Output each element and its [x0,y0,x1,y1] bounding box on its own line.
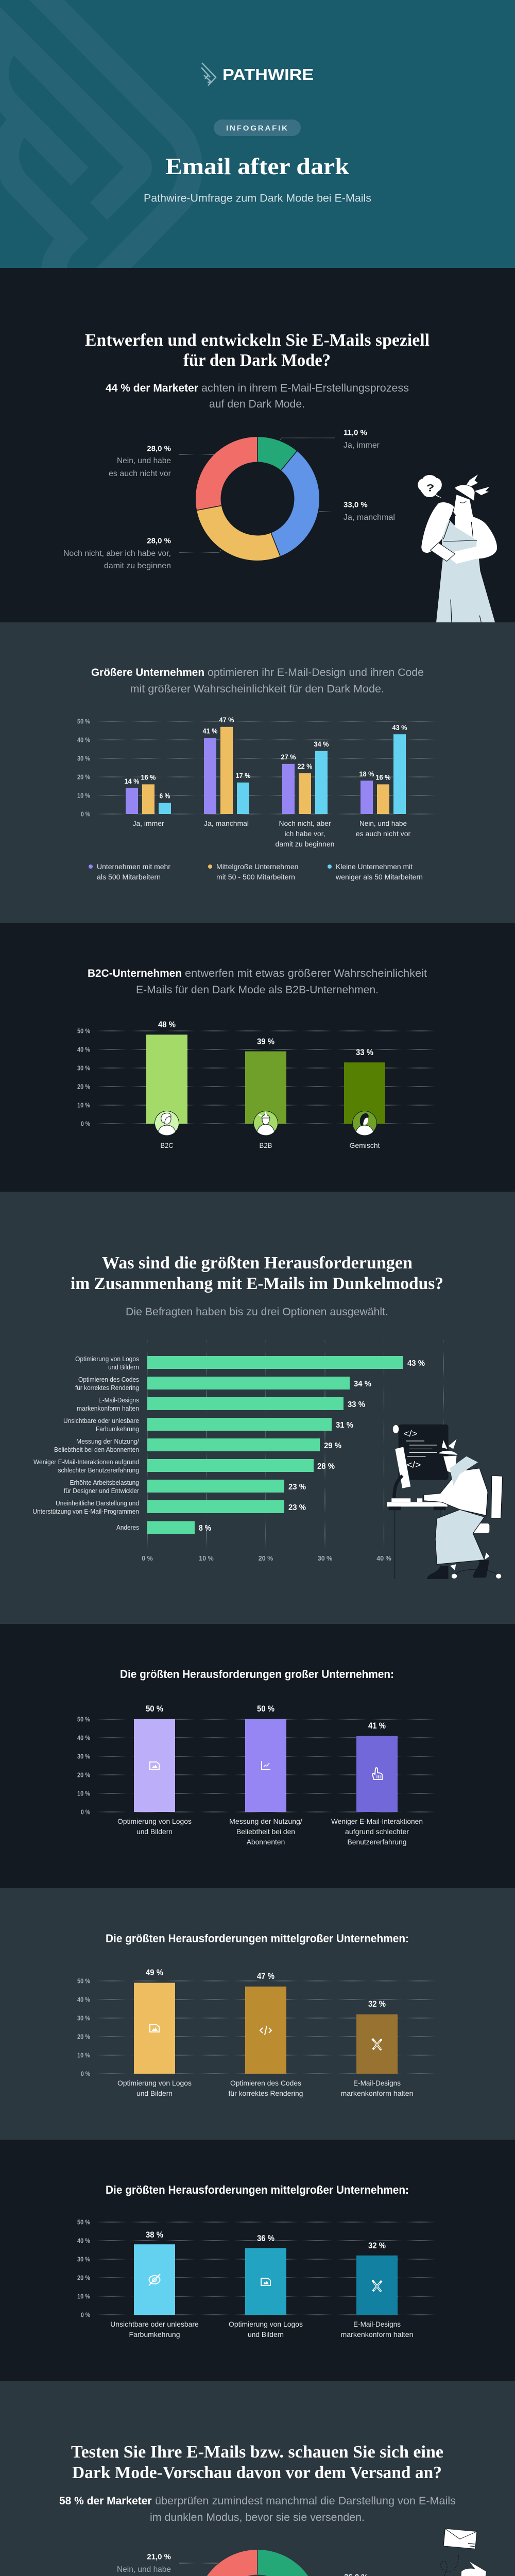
heading: Dark Mode-Vorschau davon vor dem Versand an? [72,2463,442,2482]
legend: mit 50 - 500 Mitarbeitern [216,873,295,881]
illustration: Valkyrie with phone [427,2529,502,2576]
legend [89,862,423,881]
bar chart: company size: 10 % [77,792,90,800]
heading [85,331,430,370]
pill: Infografik: INFOGRAFIK [226,124,287,133]
bar chart: challenges: 29 % [324,1442,341,1450]
label: Ja, immer: Ja, immer [344,441,380,450]
illustration: Hermes with question [418,474,497,622]
icon: pen and brush [372,2039,382,2050]
heading [71,2443,443,2482]
bar chart: challenges: 40 % [376,1555,391,1562]
bar chart: large companies: Messung der Nutzung/ [229,1817,302,1825]
legend: weniger als 50 Mitarbeitern [335,873,423,881]
bar chart: challenges: Unterstützung von E-Mail-Programmen [32,1508,139,1515]
text: B2C: B2C-Unternehmen [88,968,182,979]
panel: small companies [77,2183,436,2338]
donut chart [188,2542,327,2576]
bar chart: challenges: schlechter Benutzererfahrung [58,1467,139,1474]
bar chart: B2C B2B: B2B [260,1141,272,1149]
bar chart: challenges: Uneinheitliche Darstellung und [56,1500,139,1507]
panel: dark mode design donut [63,331,497,622]
intro text: auf den Dark Mode. [209,398,305,410]
bar chart: small companies: Farbumkehrung [129,2330,180,2338]
heading: Was sind die größten Herausforderungen [102,1253,413,1273]
bar chart: challenges: für Designer und Entwickler [64,1487,139,1495]
heading: Die größten Herausforderungen mittelgroßer Unternehmen: [106,2183,409,2196]
text: company size: mit größerer Wahrscheinlichkeit für den Dark Mode. [130,683,384,695]
text: company size [91,667,424,695]
label: Noch nicht: Noch nicht, aber ich habe vor, [63,549,171,558]
bar chart: challenges [32,1341,443,1562]
bar chart: B2C B2B: 40 % [77,1046,90,1053]
bar chart: small companies: und Bildern [248,2330,284,2338]
bar chart: challenges: für korrektes Rendering [75,1384,139,1392]
bar chart: large companies: Optimierung von Logos [117,1817,192,1825]
bar chart: company size: es auch nicht vor [356,829,411,838]
bar chart: company size: 22 % [298,762,313,770]
figure [424,1439,489,1579]
intro text [106,382,409,410]
bar chart: company size: 40 % [77,737,90,744]
intro text: überprüfen zumindest manchmal die Darstellung von E-Mails [155,2495,456,2507]
heading: im Zusammenhang mit E-Mails im Dunkelmodus? [71,1274,443,1293]
icon: image file [150,1762,159,1769]
intro text [59,2495,456,2523]
bar chart: company size: 18 % [359,770,374,778]
bar chart: challenges: 33 % [348,1400,365,1409]
bar chart: company size: 0 % [81,811,90,818]
bar chart: challenges: 20 % [259,1555,273,1562]
bar chart: B2C B2B: 30 % [77,1064,90,1072]
bar chart: medium companies: für korrektes Rendering [229,2089,303,2097]
monitor [393,1425,449,1498]
bar chart: medium companies: 40 % [77,1996,90,2003]
bar chart: challenges: 23 % [288,1503,306,1512]
bar chart: B2C B2B: 33 % [356,1047,373,1057]
label: Ja, immer [280,429,380,450]
icon: B2B medallion [253,1111,278,1137]
bar chart: small companies: E-Mail-Designs [353,2320,401,2328]
bar chart: challenges: 30 % [318,1555,332,1562]
legend: als 500 Mitarbeitern [97,873,161,881]
logo: Pathwire: PATHWIRE [222,65,314,83]
bar chart: small companies: 20 % [77,2274,90,2281]
bar chart: large companies: 41 % [368,1721,386,1731]
bar chart: large companies: und Bildern [136,1827,173,1836]
bar chart: challenges: und Bildern [108,1364,139,1371]
bar chart: company size: 14 % [125,777,140,785]
icon: pointer hand [372,1768,382,1780]
bar chart: large companies: 0 % [81,1808,90,1816]
bar chart: small companies: 38 % [146,2230,163,2240]
bar chart: large companies: 10 % [77,1790,90,1797]
bar chart: medium companies: und Bildern [136,2089,173,2097]
bar chart: company size: 30 % [77,755,90,762]
intro text: im dunklen Modus, bevor sie sie versenden. [150,2512,365,2523]
bar chart: medium companies: 20 % [77,2033,90,2040]
label: Ja, immer: 11,0 % [344,429,367,437]
envelope [443,2529,477,2549]
donut chart [188,429,327,568]
bar chart: challenges: Farbumkehrung [96,1426,139,1433]
bar chart: large companies: 50 % [146,1704,163,1714]
bar chart: B2C B2B: 10 % [77,1101,90,1109]
bar chart: company size: 16 % [141,773,156,781]
label: Noch nicht [63,537,221,570]
bar chart: medium companies [77,1968,437,2097]
bar chart: small companies: 32 % [368,2241,386,2250]
bar chart: medium companies: 10 % [77,2052,90,2059]
bar chart: challenges: Optimieren des Codes [78,1376,139,1383]
chair [452,1476,503,1579]
bar chart: large companies: 30 % [77,1753,90,1760]
bar chart: company size: Nein, und habe [359,819,407,827]
bar chart: B2C B2B: 39 % [257,1037,274,1046]
bar chart: challenges: 8 % [199,1524,211,1533]
label: Ja, manchmal: Ja, manchmal [344,513,395,522]
bar chart: company size: 17 % [236,771,251,779]
bar chart: medium companies: 49 % [146,1968,163,1977]
bar chart: large companies: Benutzererfahrung [347,1838,407,1846]
bar chart: medium companies: 0 % [81,2070,90,2077]
bar chart: small companies: 50 % [77,2218,90,2226]
bar chart: large companies: Weniger E-Mail-Interaktionen [331,1817,423,1825]
bar chart: challenges: 31 % [336,1421,353,1430]
label: Noch nicht: damit zu beginnen [104,562,171,570]
bar chart: company size: 41 % [203,726,218,735]
bar chart: company size: 20 % [77,774,90,781]
panel: B2C chart [77,968,436,1149]
bar chart: small companies [77,2218,437,2338]
label: Nein: Nein, und habe [117,2565,171,2574]
bar chart: challenges: E-Mail-Designs [98,1397,139,1404]
bar chart: challenges: Anderes [116,1524,139,1531]
bar chart: B2C B2B: 48 % [158,1020,176,1029]
bar chart: small companies: 30 % [77,2256,90,2263]
bar chart: large companies [77,1704,437,1846]
bar chart: company size: 27 % [281,753,296,761]
monitor: </> [403,1429,418,1438]
label: Nein [109,2552,218,2576]
bar chart: challenges: 34 % [354,1380,371,1388]
heading [71,1253,443,1293]
bar chart: small companies: Optimierung von Logos [229,2320,303,2328]
label: Noch nicht: 28,0 % [147,537,171,545]
bar chart: challenges: 0 % [142,1555,153,1562]
bar chart: company size: Ja, immer [133,819,164,827]
bar chart: company size: 6 % [160,791,170,800]
icon: code [260,2026,271,2035]
bar chart: company size: ich habe vor, [284,829,325,838]
bar chart: company size: Noch nicht, aber [279,819,331,827]
label: Nein: 21,0 % [147,2552,171,2562]
text: B2C: E-Mails für den Dark Mode als B2B-Unternehmen. [136,984,379,996]
bar chart: large companies: 50 % [257,1704,274,1714]
intro text: 44 % der Marketer [106,382,198,394]
bar chart: challenges: markenkonform halten [77,1405,139,1412]
bar chart: company size [77,716,437,848]
label: Ja, manchmal: 33,0 % [344,501,368,509]
panel: company size chart [0,622,515,923]
bar chart: medium companies: Optimieren des Codes [230,2079,301,2087]
bar chart: small companies: 10 % [77,2293,90,2300]
intro text: 58 % der Marketer [59,2495,152,2507]
thought bubble: ? [426,483,434,494]
text: company size: optimieren ihr E-Mail-Design und ihren Code [208,667,424,679]
bar chart: B2C B2B: 50 % [77,1027,90,1035]
bar chart: medium companies: 32 % [368,1999,386,2009]
pill: Infografik [214,120,301,136]
subtitle: Pathwire-Umfrage zum Dark Mode bei E-Mails [144,193,371,204]
bar chart: large companies: 40 % [77,1734,90,1741]
bar chart: company size: 43 % [392,723,407,732]
bar chart: challenges: 43 % [407,1359,425,1368]
icon: line chart [262,1761,270,1770]
panel: preview testing donut [0,2381,515,2576]
heading: Die größten Herausforderungen großer Unternehmen: [120,1668,394,1681]
bar chart: B2C B2B: Gemischt [349,1141,380,1149]
monitor: </> [407,1460,421,1470]
bar chart: medium companies: 47 % [257,1971,274,1981]
bar chart: large companies: 20 % [77,1771,90,1778]
bar chart: challenges: 28 % [317,1462,335,1471]
subtitle: Die Befragten haben bis zu drei Optionen ausgewählt. [126,1306,388,1318]
desk [387,1498,448,1579]
bar chart: challenges: 10 % [199,1555,214,1562]
bar chart: company size: 16 % [376,773,391,781]
bar chart: company size: 47 % [219,716,234,724]
heading: Testen Sie Ihre E-Mails bzw. schauen Sie sich eine [71,2443,443,2462]
panel: header [0,0,515,268]
heading: Die größten Herausforderungen mittelgroßer Unternehmen: [106,1932,409,1945]
heading: Entwerfen und entwickeln Sie E-Mails speziell [85,331,430,350]
bar chart: B2C B2B: 0 % [81,1120,90,1127]
bar chart: medium companies: 30 % [77,2014,90,2022]
bar chart: medium companies: markenkonform halten [341,2089,413,2097]
logo: Pathwire [201,63,314,86]
label: Nein: Nein, und habe [117,456,171,465]
icon: B2C medallion [154,1111,179,1137]
icon: image file [261,2278,270,2285]
bar chart: medium companies: Optimierung von Logos [117,2079,192,2087]
bar chart: challenges: Beliebtheit bei den Abonnenten [54,1446,139,1453]
icon: pen and brush [372,2280,382,2292]
bar chart: B2C B2B: B2C [161,1141,173,1149]
illustration: Hermes coding [387,1425,503,1579]
bar chart: company size: Ja, manchmal [204,819,249,827]
bar chart: small companies: 0 % [81,2311,90,2318]
bar chart: medium companies: E-Mail-Designs [353,2079,401,2087]
bar chart: large companies: Beliebtheit bei den [236,1827,295,1836]
title: Email after dark [165,153,349,179]
bar chart: company size: 34 % [314,740,329,748]
panel: medium companies [0,1888,515,2140]
bar chart: challenges: Weniger E-Mail-Interaktionen aufgrund [33,1459,139,1466]
bar chart: large companies: Abonnenten [247,1838,285,1846]
bar chart: small companies: 36 % [257,2233,274,2243]
icon: mixed medallion [352,1111,377,1137]
panel: large companies [77,1668,436,1846]
bar chart: small companies: Unsichtbare oder unlesbare [110,2320,199,2328]
bar chart: challenges: 23 % [288,1483,306,1492]
heading: für den Dark Mode? [183,351,331,370]
text: B2C [88,968,427,996]
bar chart: small companies: markenkonform halten [341,2330,413,2338]
label: Nein: es auch nicht vor [109,469,171,478]
bar chart: company size: 50 % [77,718,90,725]
label: Nein: 28,0 % [147,444,171,453]
bar chart: challenges: Erhöhte Arbeitsbelastung [70,1479,139,1486]
thought bubble [418,475,442,498]
bar chart: B2C B2B [77,1020,437,1149]
bar chart: challenges: Optimierung von Logos [75,1355,139,1363]
bar chart: challenges: Messung der Nutzung/ [76,1438,140,1445]
bar chart: B2C B2B: 20 % [77,1083,90,1090]
intro text: achten in ihrem E-Mail-Erstellungsprozess [201,382,409,394]
panel: challenges [0,1192,515,1624]
icon: crossed eye [149,2274,160,2285]
legend: Unternehmen mit mehr [97,862,170,871]
text: B2C: entwerfen mit etwas größerer Wahrscheinlichkeit [185,968,427,979]
bar chart: large companies: aufgrund schlechter [345,1827,409,1836]
label: Ja, manchmal [319,501,395,522]
icon: image file [150,2025,159,2032]
text: company size: Größere Unternehmen [91,667,204,679]
legend: Mittelgroße Unternehmen [216,862,299,871]
legend: Kleine Unternehmen mit [336,862,413,871]
bar chart: medium companies: 50 % [77,1977,90,1985]
label: Nein [109,444,214,478]
bar chart: company size: damit zu beginnen [275,840,335,848]
bar chart: large companies: 50 % [77,1716,90,1723]
bar chart: small companies: 40 % [77,2237,90,2244]
bar chart: challenges: Unsichtbare oder unlesbare [63,1417,139,1425]
